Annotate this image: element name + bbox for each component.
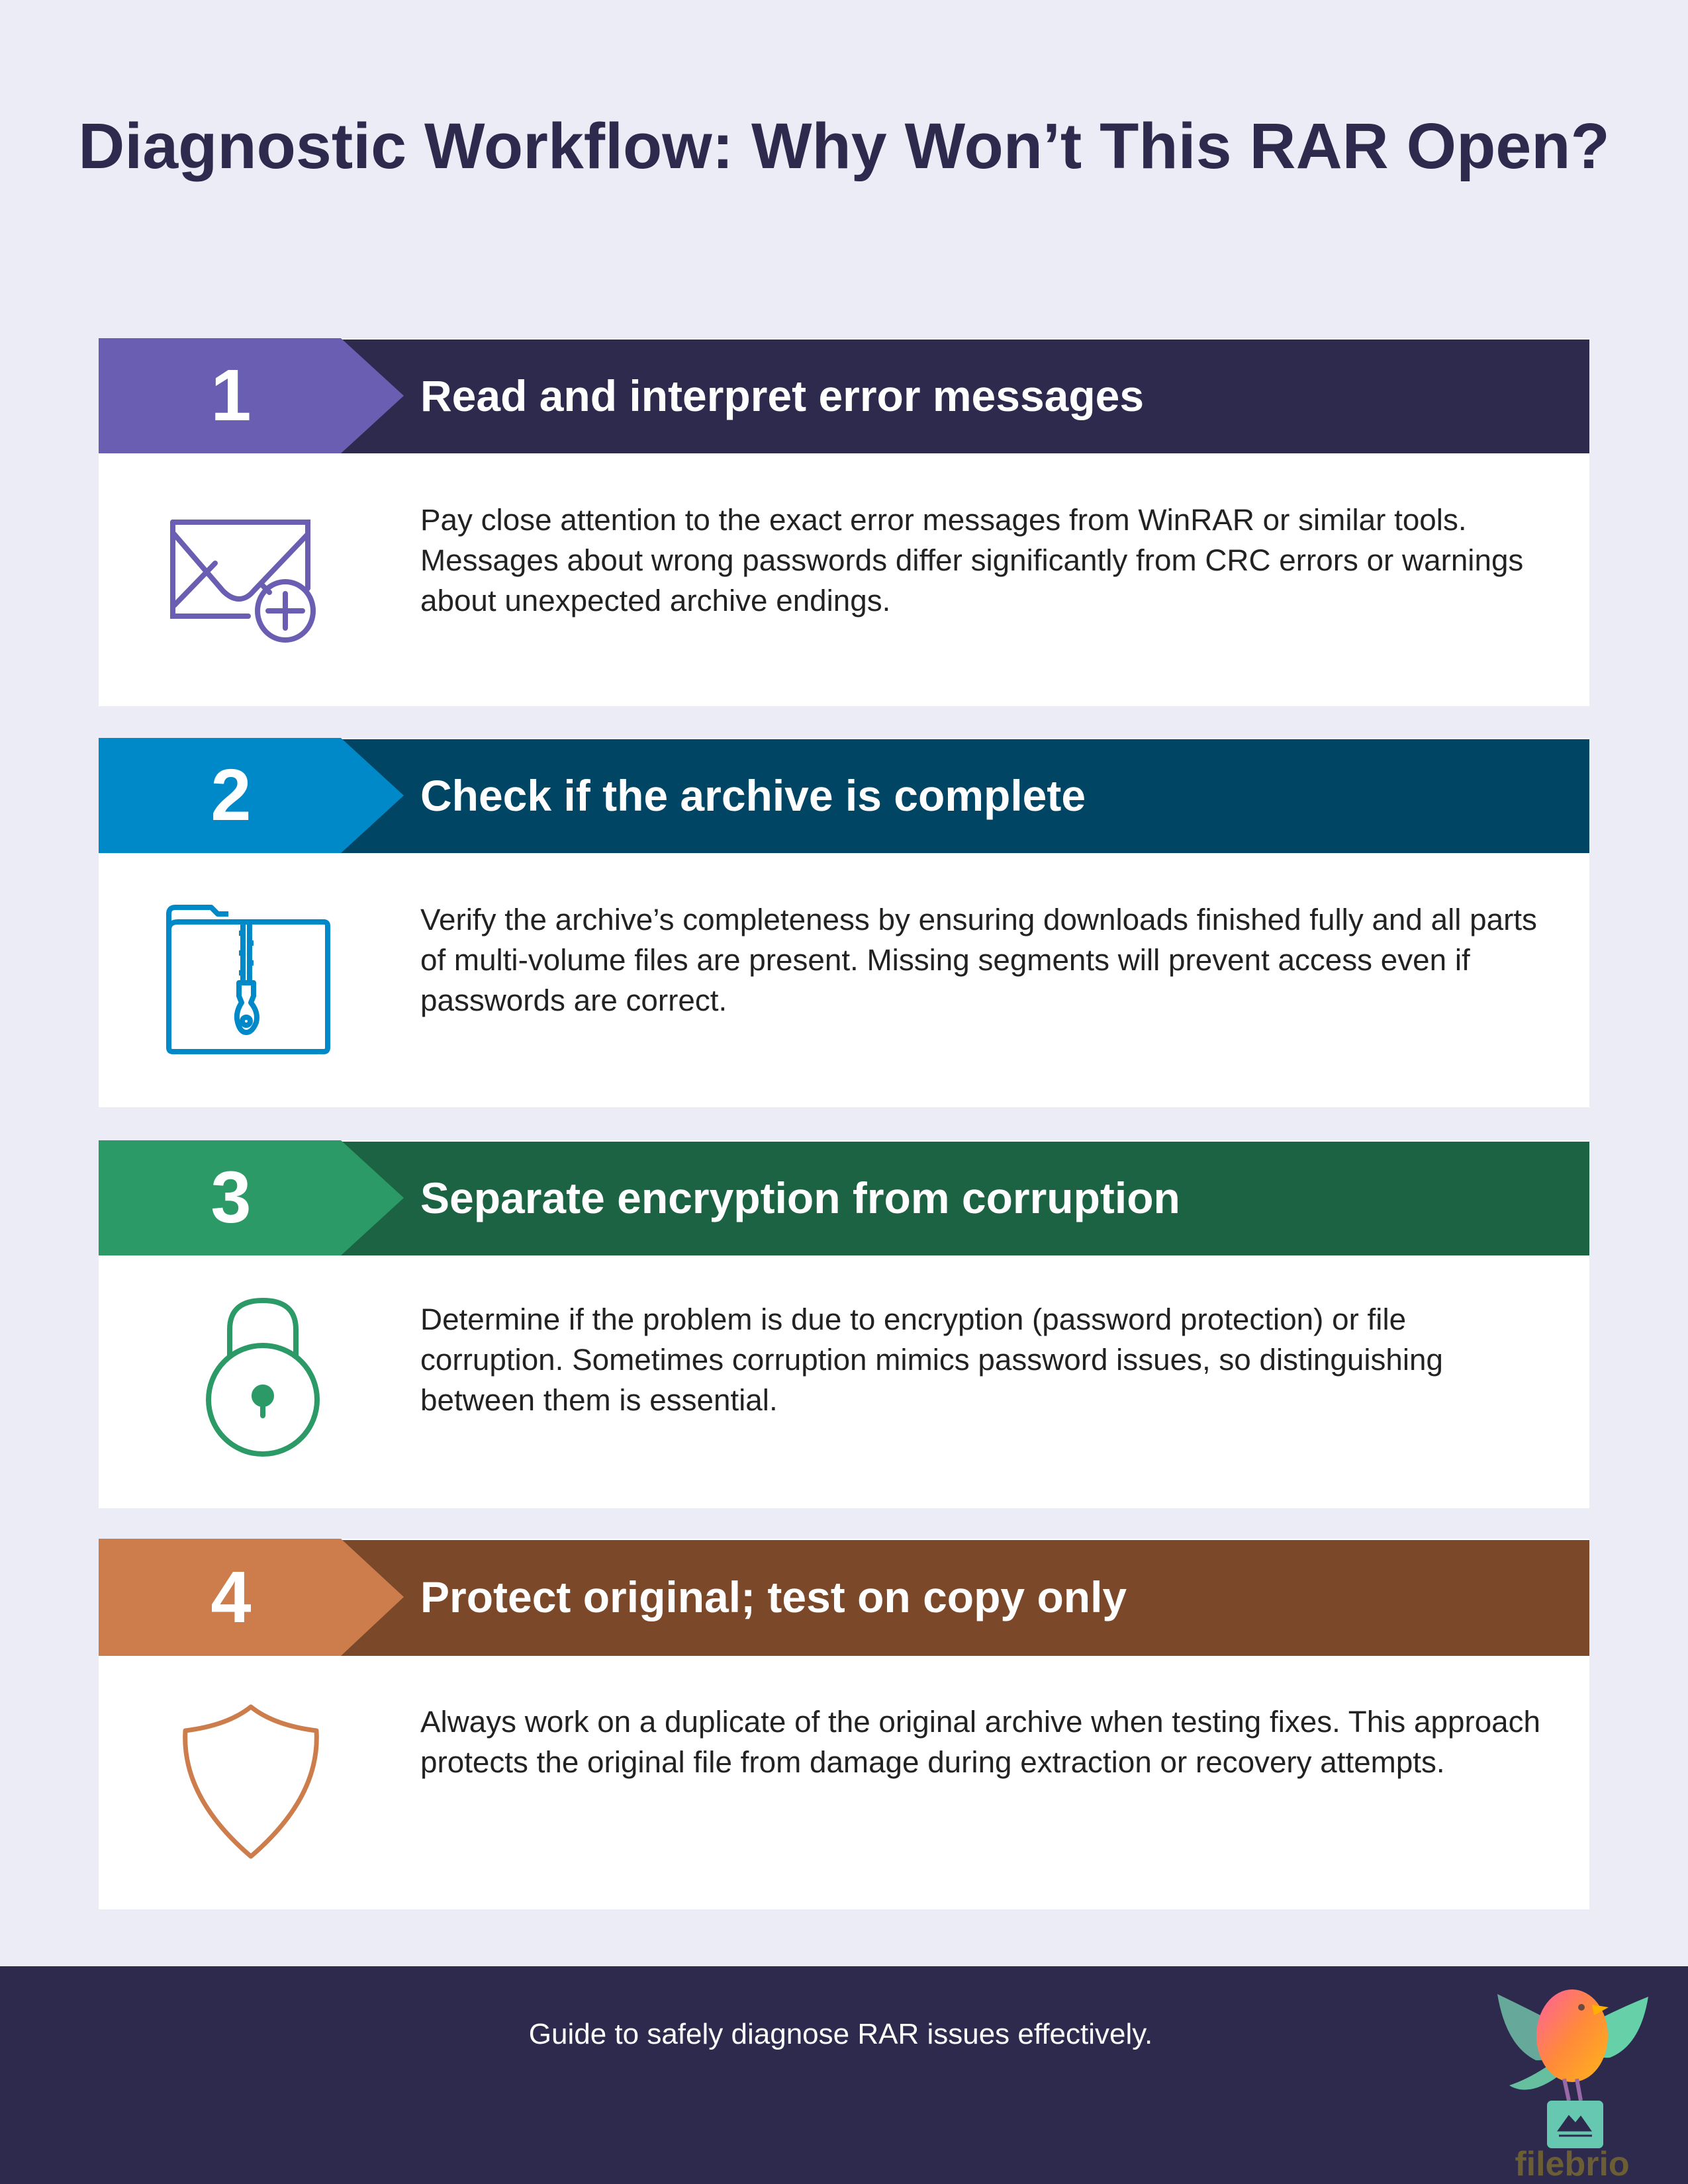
step heading 2: Check if the archive is complete [420, 771, 1086, 820]
icon: padlock [206, 1298, 320, 1457]
text block 2: passwords are correct. [420, 983, 727, 1017]
text block 3: Determine if the problem is due to encryption (password protection) or file [420, 1302, 1406, 1336]
step number 3: 3 [211, 1157, 252, 1238]
text block 3: between them is essential. [420, 1383, 778, 1417]
step number 1: 1 [211, 355, 252, 436]
text block 4 [420, 1705, 1540, 1779]
logo: filebrio bird [1497, 1989, 1648, 2178]
panel: step 2 [99, 738, 1589, 1107]
text block 2 [420, 903, 1537, 1017]
header bar 2 [99, 738, 1589, 853]
text block 4: Always work on a duplicate of the original archive when testing fixes. This approach [420, 1705, 1540, 1739]
text block 2: Verify the archive’s completeness by ensuring downloads finished fully and all parts [420, 903, 1537, 936]
step heading 4: Protect original; test on copy only [420, 1572, 1127, 1621]
title: Diagnostic Workflow: Why Won’t This RAR Open? [78, 110, 1610, 182]
text block 4: protects the original file from damage during extraction or recovery attempts. [420, 1745, 1445, 1779]
step heading 3: Separate encryption from corruption [420, 1173, 1180, 1222]
text block 1: Messages about wrong passwords differ significantly from CRC errors or warnings [420, 543, 1523, 577]
icon: zip folder [166, 905, 330, 1054]
step number 2: 2 [211, 754, 252, 836]
header bar 1 [99, 338, 1589, 453]
panel: step 4 [99, 1539, 1589, 1909]
footer [0, 1966, 1688, 2184]
panel: step 1 [99, 338, 1589, 706]
text block 1 [420, 503, 1523, 617]
header bar 3 [99, 1140, 1589, 1255]
panel: step 3 [99, 1140, 1589, 1508]
text block 3 [420, 1302, 1443, 1417]
text block 2: of multi-volume files are present. Missing segments will prevent access even if [420, 943, 1470, 977]
step number 4: 4 [211, 1557, 252, 1638]
text block 1: about unexpected archive endings. [420, 584, 890, 617]
header bar 4 [99, 1539, 1589, 1656]
step heading 1: Read and interpret error messages [420, 371, 1144, 420]
footer text: Guide to safely diagnose RAR issues effectively. [529, 2018, 1152, 2050]
icon: shield [183, 1704, 319, 1858]
icon: envelope plus [170, 520, 316, 643]
text block 3: corruption. Sometimes corruption mimics password issues, so distinguishing [420, 1343, 1443, 1377]
text block 1: Pay close attention to the exact error messages from WinRAR or similar tools. [420, 503, 1467, 537]
